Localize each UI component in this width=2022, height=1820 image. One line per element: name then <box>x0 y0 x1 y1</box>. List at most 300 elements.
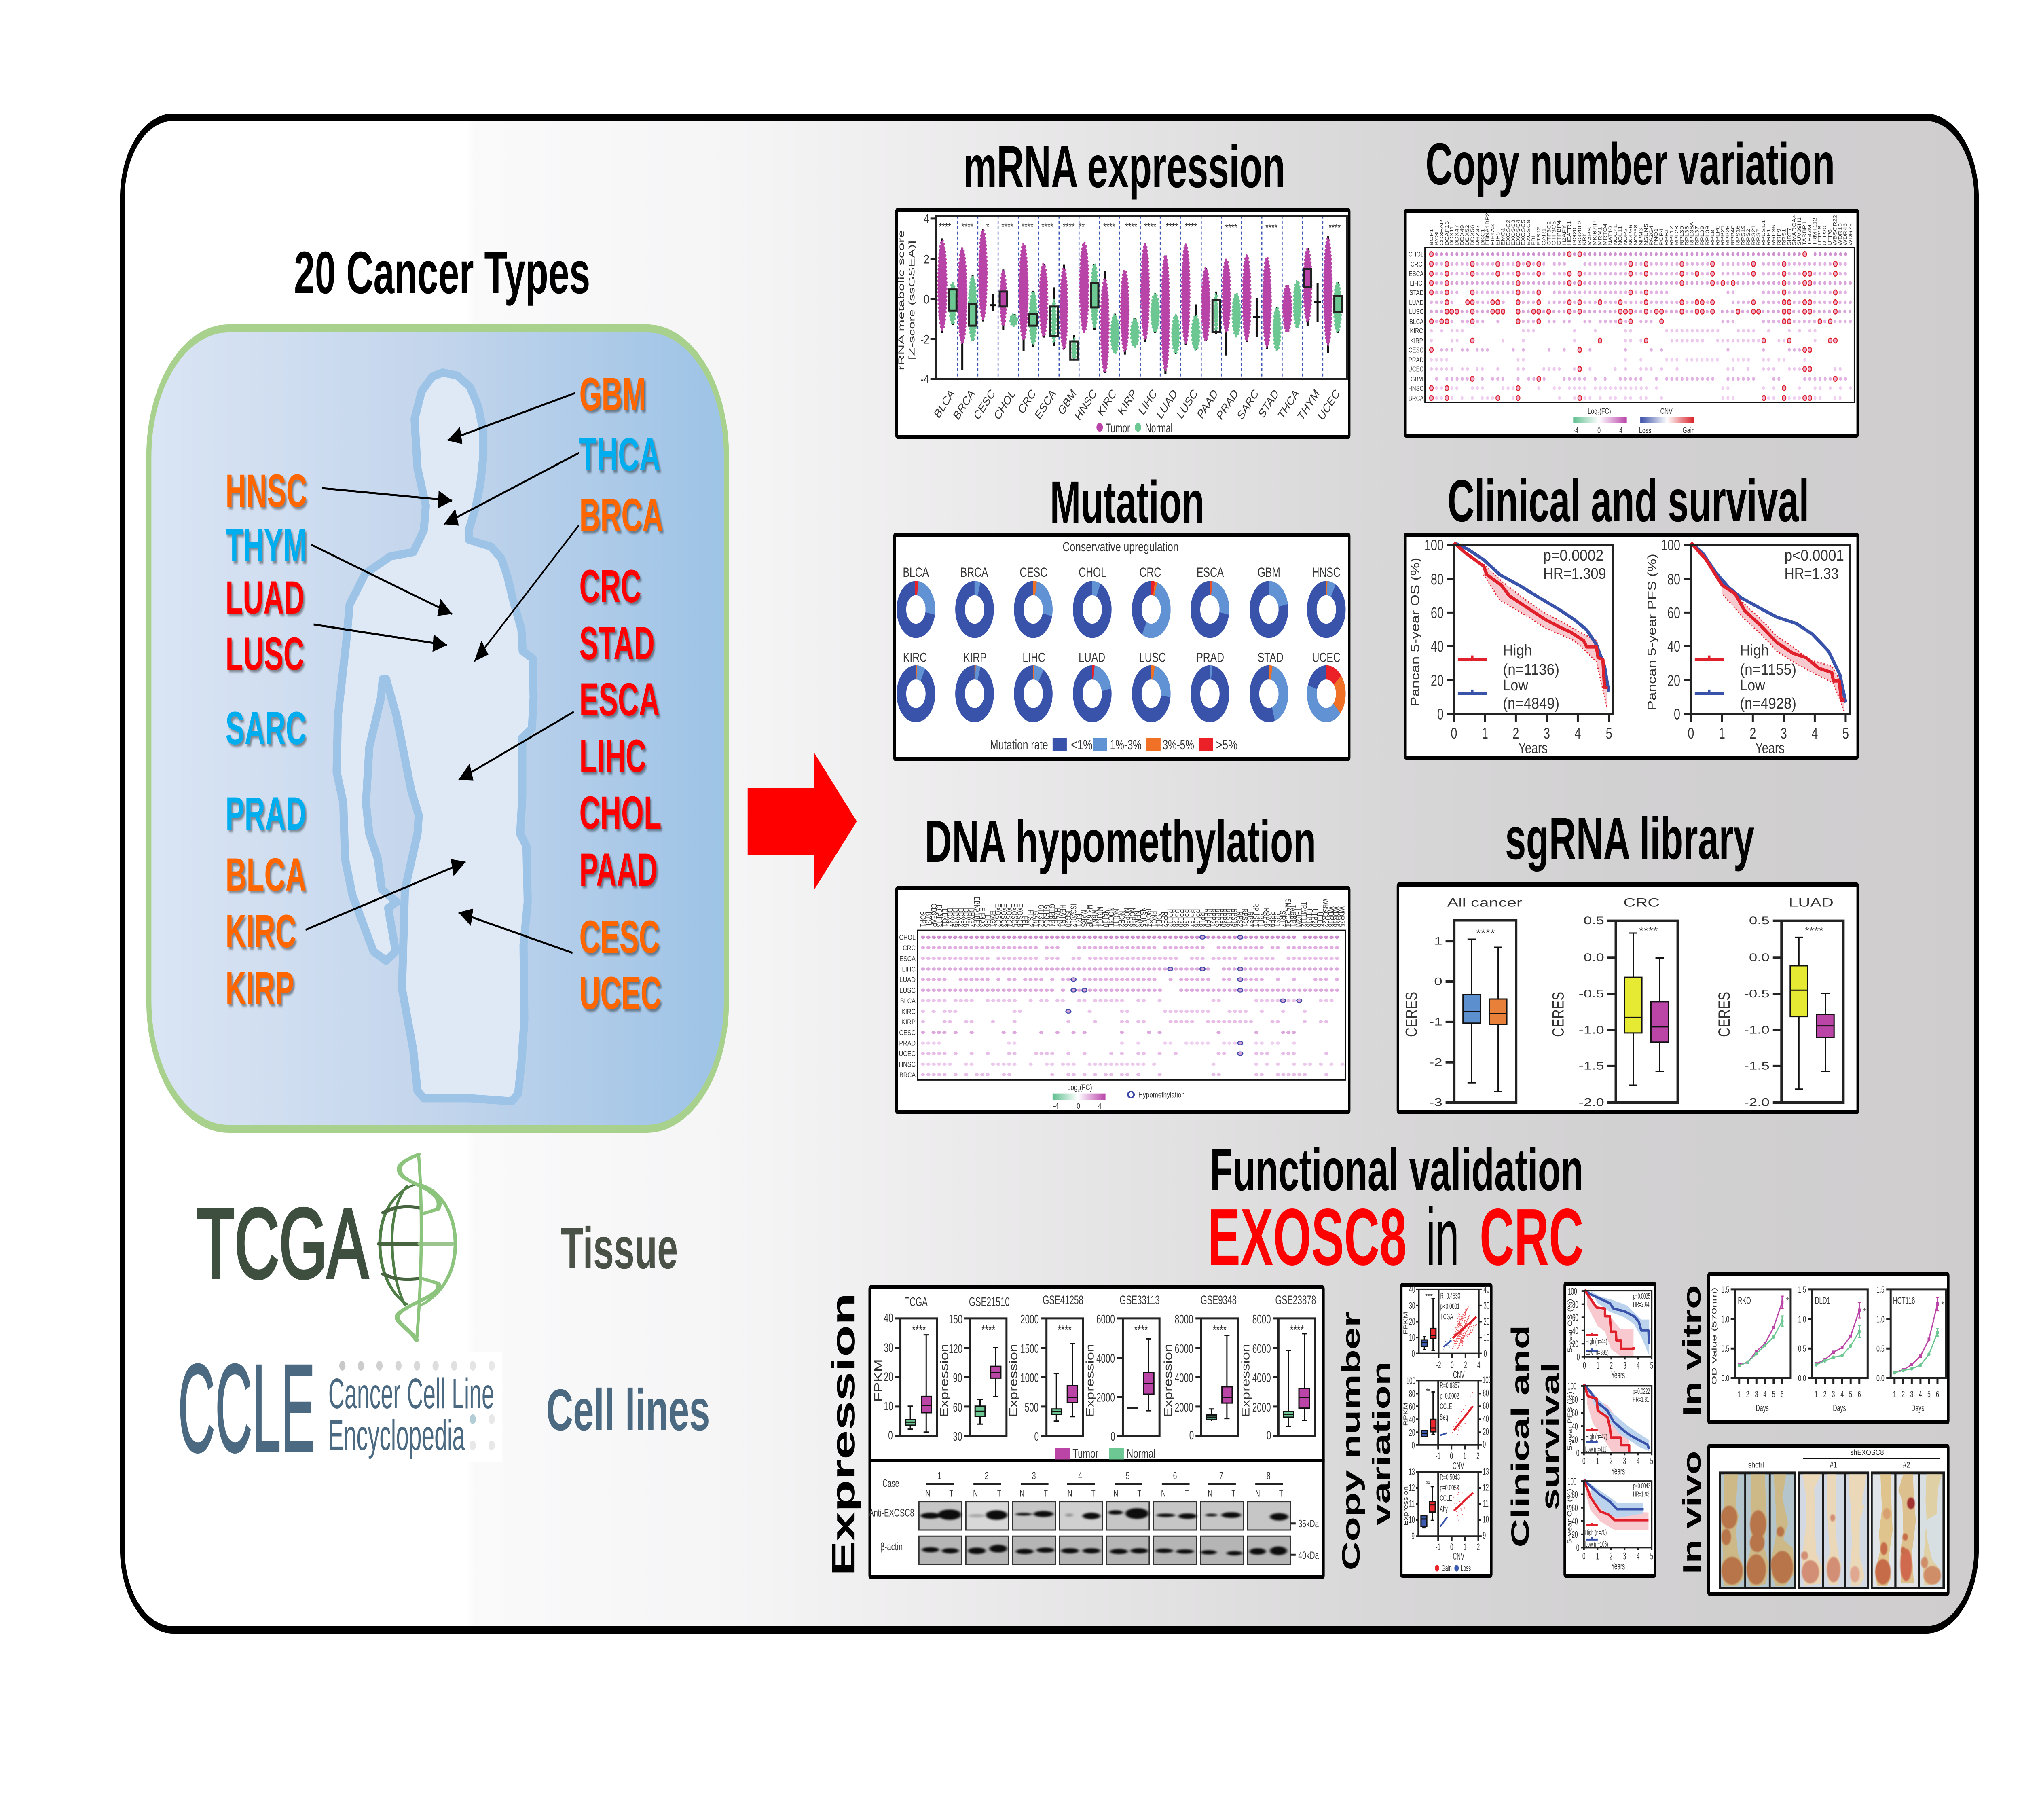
cancer type labels: BRCA <box>579 489 663 541</box>
box plot: GSE41258: 2000 <box>1020 1313 1039 1326</box>
KM plot: OS 1: 0 <box>1577 1352 1580 1363</box>
significance stars: **** <box>1328 222 1341 233</box>
cancer type names: BRCA <box>960 565 988 580</box>
heading: EXOSC8 in CRC: CRC <box>1480 1192 1584 1282</box>
significance stars: **** <box>1144 221 1157 233</box>
plot frame and ticks <box>931 216 1347 379</box>
box plot: GSE23878: 8000 <box>1252 1313 1271 1326</box>
plot: CCLE Seq RPKM vs CNV: 40 <box>1409 1414 1415 1425</box>
western blot: T <box>1231 1489 1235 1499</box>
line chart: DLD1: DLD1 <box>1815 1295 1830 1306</box>
western blot: 5 <box>1126 1470 1130 1481</box>
gene names: NPM3 <box>1133 911 1142 927</box>
box plot: GSE9348 <box>1162 1294 1238 1442</box>
plot: CCLE Affy expression vs CNV: 12 <box>1409 1482 1415 1494</box>
box plot: LUAD: -2.0 <box>1744 1096 1770 1108</box>
box plot: GSE33113: 0 <box>1110 1430 1115 1443</box>
western blot: N <box>926 1489 930 1499</box>
gene names: RPL8 <box>1197 912 1207 927</box>
cancer type labels: LUAD <box>226 572 305 624</box>
gene names: RPL36 <box>1181 909 1191 927</box>
box plot: GSE9348: Expression <box>1162 1344 1174 1417</box>
cancer type axis labels: KIRC <box>1095 386 1118 419</box>
plot: TCGA FPKM vs CNV: FPKM <box>1402 1312 1409 1335</box>
photo strips: shEXOSC8 #2 <box>1873 1474 1942 1587</box>
box plot: GSE21510: 60 <box>953 1401 962 1414</box>
KM plot: OS 1: 5-year OS (%) <box>1567 1299 1574 1352</box>
gene names: EMG1 <box>1500 227 1506 245</box>
gene names: FBL <box>1020 916 1030 927</box>
panel: mRNA expression violin chart <box>897 210 1349 437</box>
KM plot PFS: High <box>1740 642 1769 659</box>
KM plot PFS: 20 <box>1667 673 1680 689</box>
cancer type names: ESCA <box>1197 565 1224 580</box>
plot: CCLE Seq RPKM vs CNV: 40 <box>1483 1414 1489 1424</box>
legend: Tumor <box>1106 421 1130 435</box>
KM plot: OS 1: 0 <box>1583 1360 1586 1371</box>
gene names: UTP18 <box>1305 909 1314 927</box>
gene names: GTF3C5 <box>1551 221 1557 245</box>
gene names: NOP56 <box>1122 908 1132 927</box>
KM plot: PFS: 5 <box>1650 1456 1653 1467</box>
gene names: EMG1 <box>988 910 998 927</box>
row labels: PRAD <box>899 1039 916 1048</box>
gene names: RPP40 <box>1219 908 1228 927</box>
cancer type names: BLCA <box>903 565 929 580</box>
cancer type axis labels: HNSC <box>1073 386 1099 423</box>
KM plot PFS: 40 <box>1667 638 1680 655</box>
legend: tumor / normal: Tumor <box>1072 1447 1098 1460</box>
gene names: FTSJ2 <box>1026 910 1035 927</box>
box plot: GSE41258: 1000 <box>1020 1371 1039 1385</box>
gene names: RPS2 <box>1235 912 1244 927</box>
gene names: DDX56 <box>1470 225 1475 245</box>
gene names: DDX56 <box>961 908 971 927</box>
row labels: LUAD <box>899 976 916 984</box>
KM plot OS: 80 <box>1431 571 1444 588</box>
significance stars: **** <box>1041 221 1053 233</box>
western blot: β-actin <box>880 1540 903 1553</box>
KM plot: PFS: 1 <box>1596 1456 1599 1467</box>
plot: TCGA FPKM vs CNV: 20 <box>1409 1316 1415 1327</box>
significance stars: * <box>986 221 990 233</box>
box plot: CRC: **** <box>1639 926 1658 936</box>
line chart: DLD1: 3 <box>1832 1389 1835 1399</box>
gene names: DDX11 <box>940 908 950 927</box>
KM plot OS: 3 <box>1544 725 1550 742</box>
box plot: CRC: -0.5 <box>1579 988 1604 1000</box>
KM plot OS: (n=4849) <box>1503 695 1559 712</box>
KM plot: PFS: 0 <box>1582 1456 1586 1467</box>
gene names: RPUSD1 <box>1761 220 1766 245</box>
gene names: SMARCA4 <box>1791 215 1797 245</box>
row labels: LIHC <box>1410 280 1422 288</box>
western blot: T <box>1279 1489 1283 1499</box>
plot: CCLE Affy expression vs CNV <box>1402 1466 1489 1562</box>
gene names: SIRT7 <box>1278 910 1287 927</box>
cancer type names: GBM <box>1258 565 1280 580</box>
gene names: EXOSC4 <box>1515 220 1521 245</box>
group labels <box>1748 1448 1940 1469</box>
box plot: LUAD: 0.5 <box>1749 914 1770 927</box>
cancer type labels: HNSC <box>226 465 307 517</box>
western blot: Anti-EXOSC8 <box>869 1507 914 1519</box>
gene names: MARS <box>1587 227 1593 245</box>
western blot: Case <box>882 1477 899 1489</box>
line chart: RKO: 4 <box>1763 1389 1766 1399</box>
gene names: NSUN5 <box>1643 224 1649 245</box>
significance stars <box>939 221 1341 233</box>
line chart: RKO: Days <box>1756 1403 1769 1413</box>
gene names: RPL30 <box>1176 909 1185 927</box>
western blot: N <box>1161 1489 1166 1499</box>
KM plot PFS: 3 <box>1781 725 1787 742</box>
plot: CCLE Seq RPKM vs CNV: 80 <box>1409 1388 1415 1399</box>
cancer type axis labels: PAAD <box>1195 386 1220 421</box>
KM plot: PFS: High (n=47) <box>1586 1433 1607 1441</box>
line chart: RKO: 2 <box>1746 1389 1749 1399</box>
box plot: CRC <box>1550 895 1678 1108</box>
box plot: GSE21510: Expression <box>938 1344 950 1417</box>
box plot: TCGA: **** <box>912 1323 926 1337</box>
KM plot: OS 1: 5 <box>1650 1360 1653 1371</box>
gene names: RPLP0 <box>1203 908 1212 927</box>
heatmap frame <box>1425 248 1854 402</box>
logo: TCGA: TCGA <box>197 1188 368 1299</box>
cancer type names: STAD <box>1258 650 1284 665</box>
plot: TCGA FPKM vs CNV: p<0.0001 <box>1440 1302 1459 1311</box>
KM plot OS: 100 <box>1424 537 1444 554</box>
box plot: TCGA: FPKM <box>872 1359 884 1402</box>
legend: gain / loss: Loss <box>1461 1563 1471 1573</box>
panel: Clinical and survival Kaplan-Meier charts <box>1405 535 1858 758</box>
box plot: All cancer: 0 <box>1434 976 1442 987</box>
gene names: RPL36 <box>1684 226 1690 245</box>
box plot: LUAD: -1.5 <box>1744 1060 1770 1072</box>
gene names: RPS21 <box>1751 225 1756 245</box>
plot: TCGA FPKM vs CNV: 2 <box>1464 1360 1467 1371</box>
line chart: HCT116: 6 <box>1936 1389 1939 1399</box>
y axis title: OD Value (570nm) <box>1711 1287 1718 1385</box>
y axis title: [Z-score (ssGSEA)] <box>907 241 916 360</box>
KM plot: OS 2: 4 <box>1637 1551 1640 1562</box>
colour legend: Loss <box>1639 426 1651 435</box>
KM plot: PFS: 4 <box>1637 1456 1640 1467</box>
gene names: RPS19 <box>1230 908 1239 927</box>
gene names: PNO1 <box>1653 228 1659 245</box>
plot: TCGA FPKM vs CNV: -2 <box>1436 1360 1441 1371</box>
box plot: GSE9348: GSE9348 <box>1201 1294 1237 1307</box>
panel: Expression box plots and western blot <box>869 1287 1325 1577</box>
gene names: HEATR1 <box>1567 221 1572 245</box>
plot: TCGA FPKM vs CNV: 20 <box>1483 1316 1489 1327</box>
gene names: TARBP1 <box>1802 221 1807 245</box>
KM plot: PFS: Years <box>1611 1466 1625 1477</box>
box plot: LUAD: -1.0 <box>1744 1024 1770 1036</box>
box plot: CRC: -1.0 <box>1579 1024 1604 1036</box>
cancer type axis labels: LUAD <box>1155 386 1179 421</box>
gene names: UTP18 <box>1817 226 1823 245</box>
KM plot PFS <box>1646 537 1849 757</box>
gene names: NOC4L <box>1613 224 1618 245</box>
cancer type axis labels: LUSC <box>1175 386 1199 421</box>
KM plot PFS: 0 <box>1674 706 1680 723</box>
box plot: GSE33113: 2000 <box>1096 1391 1115 1404</box>
photo frames <box>1719 1471 1945 1589</box>
KM plot: OS 2: 5 <box>1650 1551 1653 1562</box>
line chart: DLD1: 5 <box>1849 1389 1852 1399</box>
column separators <box>958 216 1323 379</box>
line chart: RKO: RKO <box>1738 1295 1751 1306</box>
plot: TCGA FPKM vs CNV: 4 <box>1477 1360 1481 1371</box>
plot: CCLE Affy expression vs CNV: -1 <box>1436 1542 1440 1553</box>
cancer type names: CESC <box>1019 565 1047 580</box>
box plot: GSE41258: 1500 <box>1020 1342 1039 1356</box>
plot: CCLE Affy expression vs CNV: 13 <box>1409 1467 1415 1477</box>
line chart: RKO: 0.0 <box>1721 1373 1729 1383</box>
plot: CCLE Affy expression vs CNV: 13 <box>1483 1466 1489 1477</box>
legend: Hypomethylation <box>1138 1090 1185 1099</box>
gene names: TFB2M <box>1294 908 1303 927</box>
legend: 2 <box>1078 1088 1080 1093</box>
plot: CCLE Seq RPKM vs CNV: 0 <box>1450 1451 1453 1462</box>
gene names: MKI67IP <box>1085 905 1094 927</box>
colour legend <box>1573 407 1695 435</box>
KM plot: PFS: 3 <box>1623 1456 1626 1467</box>
KM plot OS: 0 <box>1451 725 1457 742</box>
box plot: TCGA: 10 <box>884 1400 893 1413</box>
KM plot: OS 1: Years <box>1611 1370 1625 1381</box>
cancer type axis labels: ESCA <box>1033 386 1058 422</box>
western blot: N <box>1068 1489 1072 1499</box>
panel: 20 cancer types body map <box>149 328 726 1129</box>
line chart: RKO <box>1721 1285 1791 1413</box>
plot: CCLE Seq RPKM vs CNV <box>1402 1375 1491 1472</box>
heading: Functional validation: Functional validation <box>1210 1136 1584 1203</box>
plot: CCLE Seq RPKM vs CNV: 100 <box>1407 1376 1415 1386</box>
gene names: RPP40 <box>1730 225 1735 245</box>
gene names: RRP1 <box>1256 911 1266 927</box>
western blot: T <box>1091 1489 1096 1499</box>
row labels <box>1408 251 1424 402</box>
line chart: HCT116: 1 <box>1893 1389 1896 1399</box>
box plot: GSE21510: 120 <box>949 1342 962 1356</box>
western blot: 8 <box>1267 1470 1271 1481</box>
box plot: GSE33113: Expression <box>1084 1344 1096 1417</box>
cancer type labels: THYM <box>226 520 307 571</box>
gene names: RPS7 <box>1246 912 1255 927</box>
box plot: All cancer: -3 <box>1429 1096 1442 1108</box>
group labels: #2 <box>1903 1460 1910 1469</box>
cancer type axis labels: PRAD <box>1215 386 1240 423</box>
cancer type names: HNSC <box>1312 565 1341 580</box>
gene names: EBNA1BP2 <box>1485 212 1490 245</box>
row labels: UCEC <box>899 1050 916 1058</box>
western blot: T <box>949 1489 953 1499</box>
box plot: All cancer: -2 <box>1429 1056 1442 1068</box>
gene names: EIF6 <box>983 914 992 927</box>
KM plot: OS 1: HR=2.64 <box>1633 1301 1650 1309</box>
plot: CCLE Seq RPKM vs CNV: 20 <box>1409 1427 1415 1438</box>
row labels: ESCA <box>1409 270 1424 278</box>
cancer type labels: KIRC <box>226 906 296 957</box>
plot: CCLE Seq RPKM vs CNV: Seq <box>1440 1412 1448 1422</box>
box plot: GSE41258: GSE41258 <box>1043 1294 1083 1307</box>
significance stars: **** <box>1125 221 1137 233</box>
box plot: GSE21510 <box>938 1295 1010 1443</box>
hypomethylation rings <box>1068 937 1299 1054</box>
KM plot: PFS: 0 <box>1576 1448 1579 1459</box>
y tick labels: -2 <box>920 332 929 346</box>
colour legend: -4 <box>1573 426 1578 435</box>
western blot: 3 <box>1032 1470 1036 1481</box>
plot: CCLE Affy expression vs CNV: 0 <box>1450 1542 1453 1553</box>
line chart: HCT116: 4 <box>1919 1389 1922 1399</box>
gene names: RPL37 <box>1187 909 1196 927</box>
cancer type labels <box>226 368 663 1019</box>
line chart: HCT116: HCT116 <box>1893 1295 1915 1306</box>
western blot: T <box>1044 1489 1048 1499</box>
western blot <box>869 1470 1319 1564</box>
gene names: EXOSC8 <box>1525 220 1531 245</box>
box plot: GSE9348: **** <box>1213 1323 1227 1337</box>
cancer type labels: KIRP <box>226 963 294 1014</box>
group labels: shctrl <box>1748 1460 1764 1469</box>
panel: Expression box plots and western blot: Normal <box>1127 1447 1155 1460</box>
box plot: GSE23878: 2000 <box>1252 1401 1271 1414</box>
cancer type names: CHOL <box>1079 565 1106 580</box>
donuts <box>901 588 1341 715</box>
box plot: LUAD <box>1716 895 1843 1108</box>
legend: gain / loss: Gain <box>1442 1563 1452 1573</box>
plot: CCLE Affy expression vs CNV: 9 <box>1483 1530 1486 1541</box>
gene names: GAR1 <box>1031 911 1041 927</box>
gene names: DDX47 <box>945 908 955 927</box>
gene names: RPL37 <box>1694 226 1700 245</box>
gene names: RPS16 <box>1225 908 1234 927</box>
side label: Clinical and survival: survival <box>1536 1362 1564 1510</box>
plot: CCLE Affy expression vs CNV: R=0.5043 <box>1440 1472 1460 1482</box>
plot: TCGA FPKM vs CNV: 40 <box>1483 1284 1489 1295</box>
group labels: shEXOSC8 <box>1850 1448 1884 1457</box>
KM plot OS <box>1409 537 1613 757</box>
arrow: big red arrow <box>748 753 857 889</box>
box plot: All cancer <box>1403 895 1522 1108</box>
plot: CCLE Affy expression vs CNV: 11 <box>1483 1498 1489 1509</box>
gene names: EXOSC3 <box>1510 220 1516 245</box>
plot: TCGA FPKM vs CNV <box>1402 1284 1489 1380</box>
heatmap frame <box>918 930 1345 1080</box>
KM plot: PFS: 60 <box>1572 1408 1578 1419</box>
plot: CCLE Affy expression vs CNV: 11 <box>1409 1498 1415 1509</box>
gene names: NPM3 <box>1638 228 1643 245</box>
gene names: RPL12 <box>1165 909 1175 927</box>
gene names: POP4 <box>1658 229 1664 245</box>
gene names: GTPBP4 <box>1047 904 1057 927</box>
western blot: N <box>1255 1489 1260 1499</box>
plot: TCGA FPKM vs CNV: 0 <box>1412 1348 1415 1359</box>
cancer type axis labels: UCEC <box>1316 386 1342 423</box>
heading: mRNA expression: mRNA expression <box>964 133 1285 200</box>
line chart: DLD1: 2 <box>1823 1389 1827 1399</box>
gene names: WDR46 <box>1842 223 1848 245</box>
row labels: KIRC <box>1410 327 1423 335</box>
plot: TCGA FPKM vs CNV: CNV <box>1453 1369 1465 1380</box>
gene names: EXOSC5 <box>1010 903 1019 927</box>
gene names: DHX37 <box>967 908 976 927</box>
gene names: TFB2M <box>1807 225 1812 245</box>
box plot: GSE21510: GSE21510 <box>969 1295 1010 1309</box>
line chart: DLD1 <box>1798 1285 1868 1413</box>
box plot: TCGA: 20 <box>884 1371 893 1384</box>
gene names: RPP25 <box>1214 908 1223 927</box>
cancer type names <box>903 565 1341 665</box>
line chart: DLD1: 0.0 <box>1798 1373 1806 1383</box>
plot: CCLE Affy expression vs CNV: 10 <box>1483 1514 1489 1525</box>
gene names: RPL28 <box>1674 226 1679 245</box>
panel: DNA hypomethylation heatmap <box>897 888 1349 1112</box>
line chart: HCT116: 0.0 <box>1876 1373 1885 1383</box>
gene names: DDX49 <box>1459 225 1465 245</box>
line chart: DLD1: * <box>1863 1307 1866 1317</box>
gene names: RPL30 <box>1679 226 1685 245</box>
row labels: PRAD <box>1409 356 1423 364</box>
row labels: BRCA <box>899 1071 916 1079</box>
gene names: WDR18 <box>1326 906 1336 927</box>
cancer type labels: PAAD <box>579 844 658 896</box>
plot: CCLE Affy expression vs CNV: ** <box>1426 1479 1430 1489</box>
KM plot: OS 1: 60 <box>1572 1312 1578 1323</box>
group labels: #1 <box>1830 1460 1837 1469</box>
cancer type axis labels: CRC <box>1016 386 1038 417</box>
legend: Log <box>1067 1083 1078 1092</box>
KM plot: OS 1: High (n=44) <box>1586 1337 1607 1346</box>
cancer type labels: PRAD <box>226 788 307 840</box>
gene names: EXOSC2 <box>994 903 1003 927</box>
y axis title: rRNA metabolic score <box>897 230 906 370</box>
KM plot PFS: 0 <box>1688 725 1694 742</box>
box plot: GSE21510: 150 <box>949 1313 962 1326</box>
legend: (FC) <box>1080 1083 1092 1092</box>
box plot: GSE9348: 0 <box>1189 1429 1194 1442</box>
cancer type labels: SARC <box>226 703 307 754</box>
cancer type names: CRC <box>1140 565 1161 580</box>
KM plot OS: 20 <box>1431 673 1444 689</box>
gene names: RRS1 <box>1781 229 1787 245</box>
box plot: All cancer: All cancer <box>1447 895 1522 909</box>
plot: CCLE Seq RPKM vs CNV: R=0.6357 <box>1440 1380 1460 1390</box>
KM plot OS: 1 <box>1482 725 1488 742</box>
cancer type labels: STAD <box>579 618 655 669</box>
box plot: GSE23878: 0 <box>1267 1429 1271 1442</box>
KM plot: OS 2: Low (n=106) <box>1585 1541 1608 1549</box>
gene names: H2AFY <box>1053 908 1062 927</box>
western blot: N <box>1208 1489 1212 1499</box>
plot: CCLE Affy expression vs CNV: p=0.0053 <box>1440 1483 1459 1492</box>
gene names: GTF3C5 <box>1042 905 1051 927</box>
KM plot: OS 1: 80 <box>1572 1299 1578 1310</box>
box plot: GSE33113: 6000 <box>1096 1313 1115 1326</box>
legend: tumor / normal <box>1055 1447 1155 1460</box>
KM plot: OS 2: HR=1.93 <box>1633 1491 1650 1499</box>
plot: TCGA FPKM vs CNV: 0 <box>1484 1348 1487 1359</box>
panel: Mutation donut charts <box>895 535 1349 759</box>
gene names: CD3EAP <box>1439 220 1445 245</box>
plot: CCLE Seq RPKM vs CNV: 0 <box>1483 1439 1486 1450</box>
label: Tissue: Tissue <box>561 1215 678 1281</box>
gene names: GTF3C2 <box>1546 221 1552 245</box>
plot: CCLE Affy expression vs CNV: 10 <box>1409 1515 1415 1526</box>
